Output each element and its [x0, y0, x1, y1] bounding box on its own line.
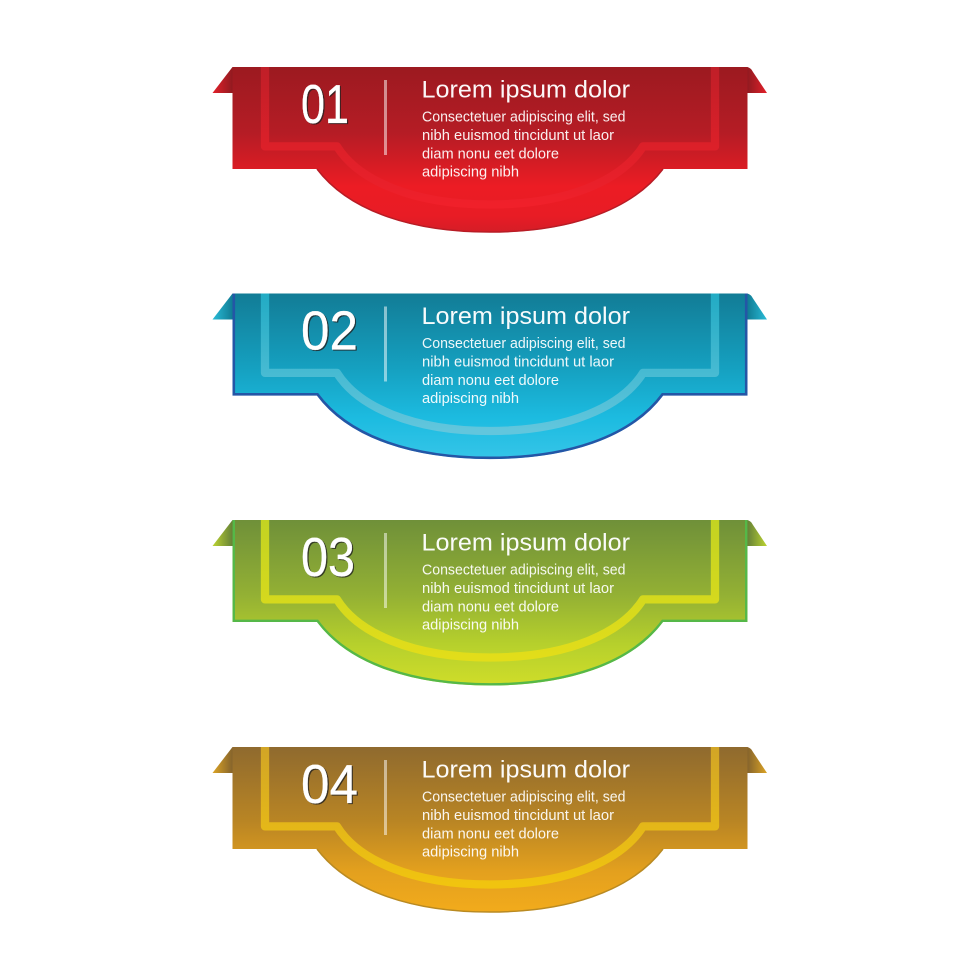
panel: ribbon 03: [212, 520, 767, 686]
inner band: [265, 520, 715, 658]
body text: nibh euismod tincidunt ut laor: [422, 127, 614, 144]
body text: nibh euismod tincidunt ut laor: [422, 354, 614, 370]
ribbon edge: [234, 294, 746, 458]
number: 01: [302, 74, 350, 136]
right fold: [747, 747, 767, 773]
inner band: [265, 747, 715, 884]
ribbon edge: [317, 849, 663, 912]
heading: Lorem ipsum dolor: [422, 530, 630, 556]
ribbon edge: [234, 520, 746, 684]
body text: Consectetuer adipiscing elit, sed: [422, 562, 626, 578]
body text: adipiscing nibh: [422, 390, 519, 407]
left fold: [212, 294, 233, 320]
ribbon body: [232, 520, 748, 686]
ribbon body: [232, 747, 748, 912]
number: 03: [301, 526, 355, 588]
divider: [384, 760, 387, 835]
divider: [384, 306, 387, 382]
body text: diam nonu eet dolore: [422, 825, 559, 842]
left fold: [212, 747, 233, 773]
panel: ribbon 04: [212, 747, 767, 912]
body text: Consectetuer adipiscing elit, sed: [422, 108, 626, 126]
number: 01: [301, 73, 349, 135]
heading: Lorem ipsum dolor: [422, 756, 630, 784]
body text: adipiscing nibh: [422, 164, 519, 181]
body text: [422, 562, 626, 634]
ribbon edge: [317, 169, 663, 232]
left fold: [212, 67, 233, 93]
body text: diam nonu eet dolore: [422, 598, 559, 615]
body text: [422, 788, 626, 861]
number: 04: [302, 754, 359, 816]
number: 02: [302, 300, 359, 362]
body text: nibh euismod tincidunt ut laor: [422, 807, 614, 824]
body text: adipiscing nibh: [422, 844, 519, 861]
divider: [384, 80, 387, 155]
inner band: [265, 67, 715, 204]
body text: Consectetuer adipiscing elit, sed: [422, 335, 626, 352]
right fold: [747, 520, 767, 546]
body text: diam nonu eet dolore: [422, 372, 559, 389]
number: 03: [302, 527, 356, 589]
ribbon body: [232, 67, 748, 232]
panel: ribbon 02: [212, 294, 767, 459]
right fold: [747, 294, 767, 320]
ribbon body: [232, 294, 748, 459]
body text: Consectetuer adipiscing elit, sed: [422, 788, 626, 806]
divider: [384, 533, 387, 608]
body text: [422, 108, 626, 181]
body text: [422, 335, 626, 407]
body text: nibh euismod tincidunt ut laor: [422, 580, 614, 597]
body text: adipiscing nibh: [422, 617, 519, 634]
inner band: [265, 294, 715, 431]
left fold: [212, 520, 233, 546]
heading: Lorem ipsum dolor: [422, 303, 630, 330]
body text: diam nonu eet dolore: [422, 145, 559, 162]
panel: ribbon 01: [212, 67, 767, 232]
heading: Lorem ipsum dolor: [422, 76, 630, 104]
number: 04: [301, 753, 358, 815]
right fold: [747, 67, 767, 93]
number: 02: [301, 300, 358, 362]
